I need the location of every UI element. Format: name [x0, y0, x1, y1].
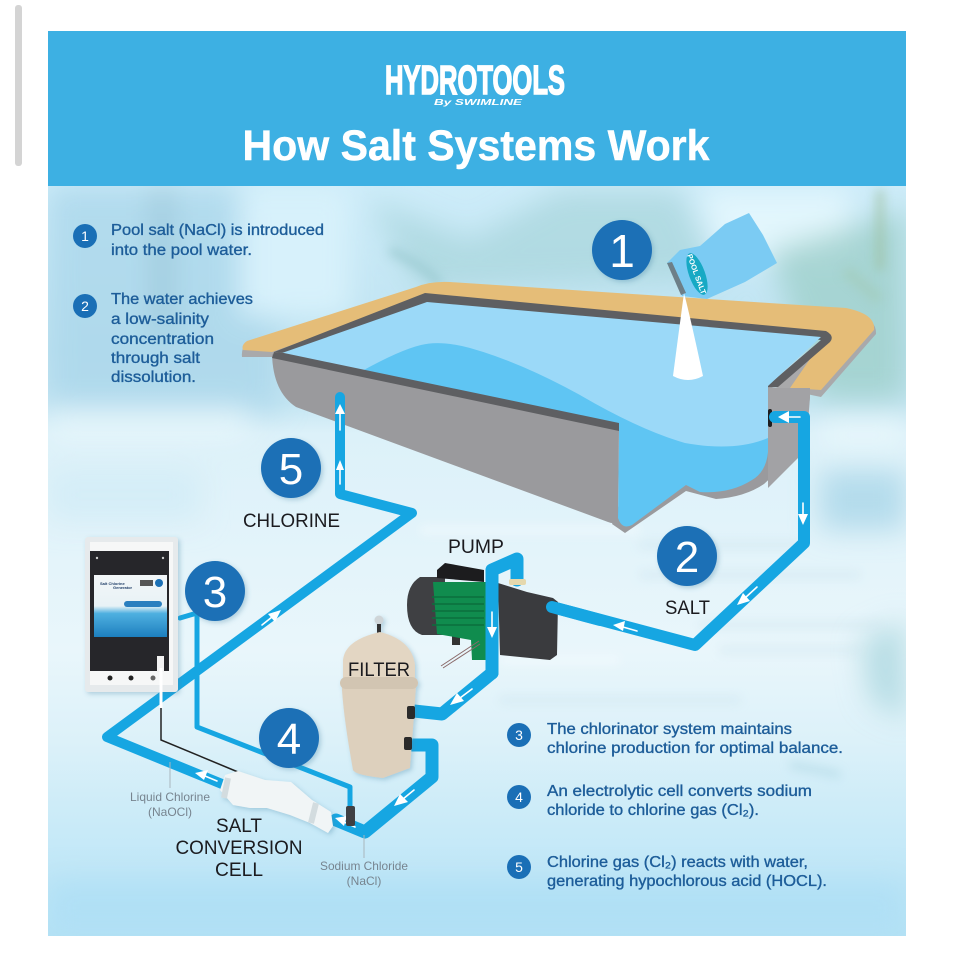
logo: Hydrotools by Swimline: By SWIMLINE	[434, 97, 523, 107]
badge 4: 4	[277, 715, 301, 764]
title: How Salt Systems Work	[242, 122, 710, 170]
step 3 text: 3	[515, 727, 523, 743]
badge 3	[185, 561, 245, 621]
filter to cell pipe	[336, 745, 432, 832]
step 1 text: into the pool water.	[111, 242, 252, 259]
blurred pool background	[48, 186, 906, 936]
step 5 text: 5	[515, 859, 523, 875]
pipe network	[107, 397, 808, 832]
pool back wall	[612, 386, 810, 533]
bag of pool salt	[667, 213, 777, 299]
pump volute	[498, 583, 558, 660]
return pipe to pool	[107, 397, 412, 784]
step 1 text: 1	[81, 228, 89, 244]
badge 1	[592, 220, 652, 280]
salt conversion cell	[220, 771, 333, 833]
label liquid chlorine	[130, 762, 210, 819]
pump cap	[437, 563, 484, 582]
scrollbar	[15, 5, 22, 166]
wall end cap	[768, 388, 810, 488]
header banner	[48, 31, 906, 186]
step 2 text: through salt	[111, 350, 201, 367]
step 2 text: The water achieves	[111, 291, 253, 308]
label salt conversion cell: CONVERSION	[176, 838, 302, 859]
pool salt label: POOL SALT	[685, 253, 708, 296]
label liquid chlorine: (NaOCl)	[148, 805, 192, 819]
step 5 text	[507, 854, 827, 890]
badge 5	[261, 438, 321, 498]
step 5 text: generating hypochlorous acid (HOCL).	[547, 873, 827, 890]
pump pipe overlay	[486, 572, 498, 673]
step 3 text: chlorine production for optimal balance.	[547, 740, 843, 757]
skimmer port	[768, 409, 772, 427]
label sodium chloride: Sodium Chloride	[320, 859, 408, 873]
pool illustration	[242, 282, 876, 533]
logo: Hydrotools by Swimline: HYDROTOOLS	[385, 57, 565, 103]
pool front wall	[272, 354, 619, 523]
badge 2	[657, 526, 717, 586]
label pump: PUMP	[448, 537, 504, 558]
label filter: FILTER	[348, 660, 410, 681]
badge 1: 1	[609, 225, 635, 277]
label liquid chlorine: Liquid Chlorine	[130, 790, 210, 804]
label chlorine: CHLORINE	[243, 511, 340, 532]
label salt conversion cell: CELL	[215, 860, 263, 881]
step 3 text	[507, 721, 843, 757]
badge 5: 5	[279, 445, 303, 494]
pump motor	[407, 577, 445, 635]
label salt conversion cell: SALT	[216, 816, 262, 837]
pump inlet pipe overlay	[552, 607, 600, 620]
badge 2: 2	[675, 533, 699, 582]
filter tank	[340, 616, 418, 778]
badge 3: 3	[203, 568, 227, 617]
step 2 text: dissolution.	[111, 369, 196, 386]
salt stream	[673, 293, 703, 380]
component labels	[130, 511, 710, 888]
pump feet	[452, 634, 460, 645]
step 2 text: concentration	[111, 331, 214, 348]
step 1 text: Pool salt (NaCl) is introduced	[111, 222, 324, 239]
step 4 text: chloride to chlorine gas (Cl₂).	[547, 802, 759, 819]
label sodium chloride: (NaCl)	[347, 874, 381, 888]
water pump	[407, 563, 600, 673]
step 3 text: The chlorinator system maintains	[547, 721, 792, 738]
logo: Hydrotools by Swimline	[385, 57, 565, 107]
step 4 text: 4	[515, 789, 523, 805]
step 4 text: An electrolytic cell converts sodium	[547, 783, 812, 800]
label sodium chloride	[320, 835, 408, 888]
controller panel	[94, 575, 167, 637]
pool outlet pipe	[552, 417, 804, 645]
label salt: SALT	[665, 598, 710, 619]
step descriptions	[73, 222, 843, 890]
label salt conversion cell	[176, 816, 302, 881]
pool rim	[274, 293, 832, 387]
badge 4	[259, 708, 319, 768]
step 2 text	[73, 291, 253, 386]
pump green housing	[433, 582, 486, 660]
pipe arrows	[195, 404, 808, 827]
cell sensor	[346, 806, 355, 826]
step 2 text: a low-salinity	[111, 311, 209, 328]
dark water	[362, 343, 768, 526]
step badges	[185, 220, 717, 768]
step 2 text: 2	[81, 298, 89, 314]
pool deck	[242, 282, 876, 397]
chlorine cell wiring	[161, 708, 238, 772]
salt chlorine generator controller	[85, 537, 178, 692]
pump to filter pipe	[414, 559, 517, 714]
controller sense line	[180, 613, 350, 806]
step 1 text	[73, 222, 324, 259]
light water	[282, 302, 821, 460]
wall top edge	[272, 352, 619, 431]
controller panel: Generator	[113, 585, 133, 590]
step 5 text: Chlorine gas (Cl₂) reacts with water,	[547, 854, 808, 871]
controller panel: Salt Chlorine	[100, 581, 125, 586]
step 4 text	[507, 783, 812, 819]
